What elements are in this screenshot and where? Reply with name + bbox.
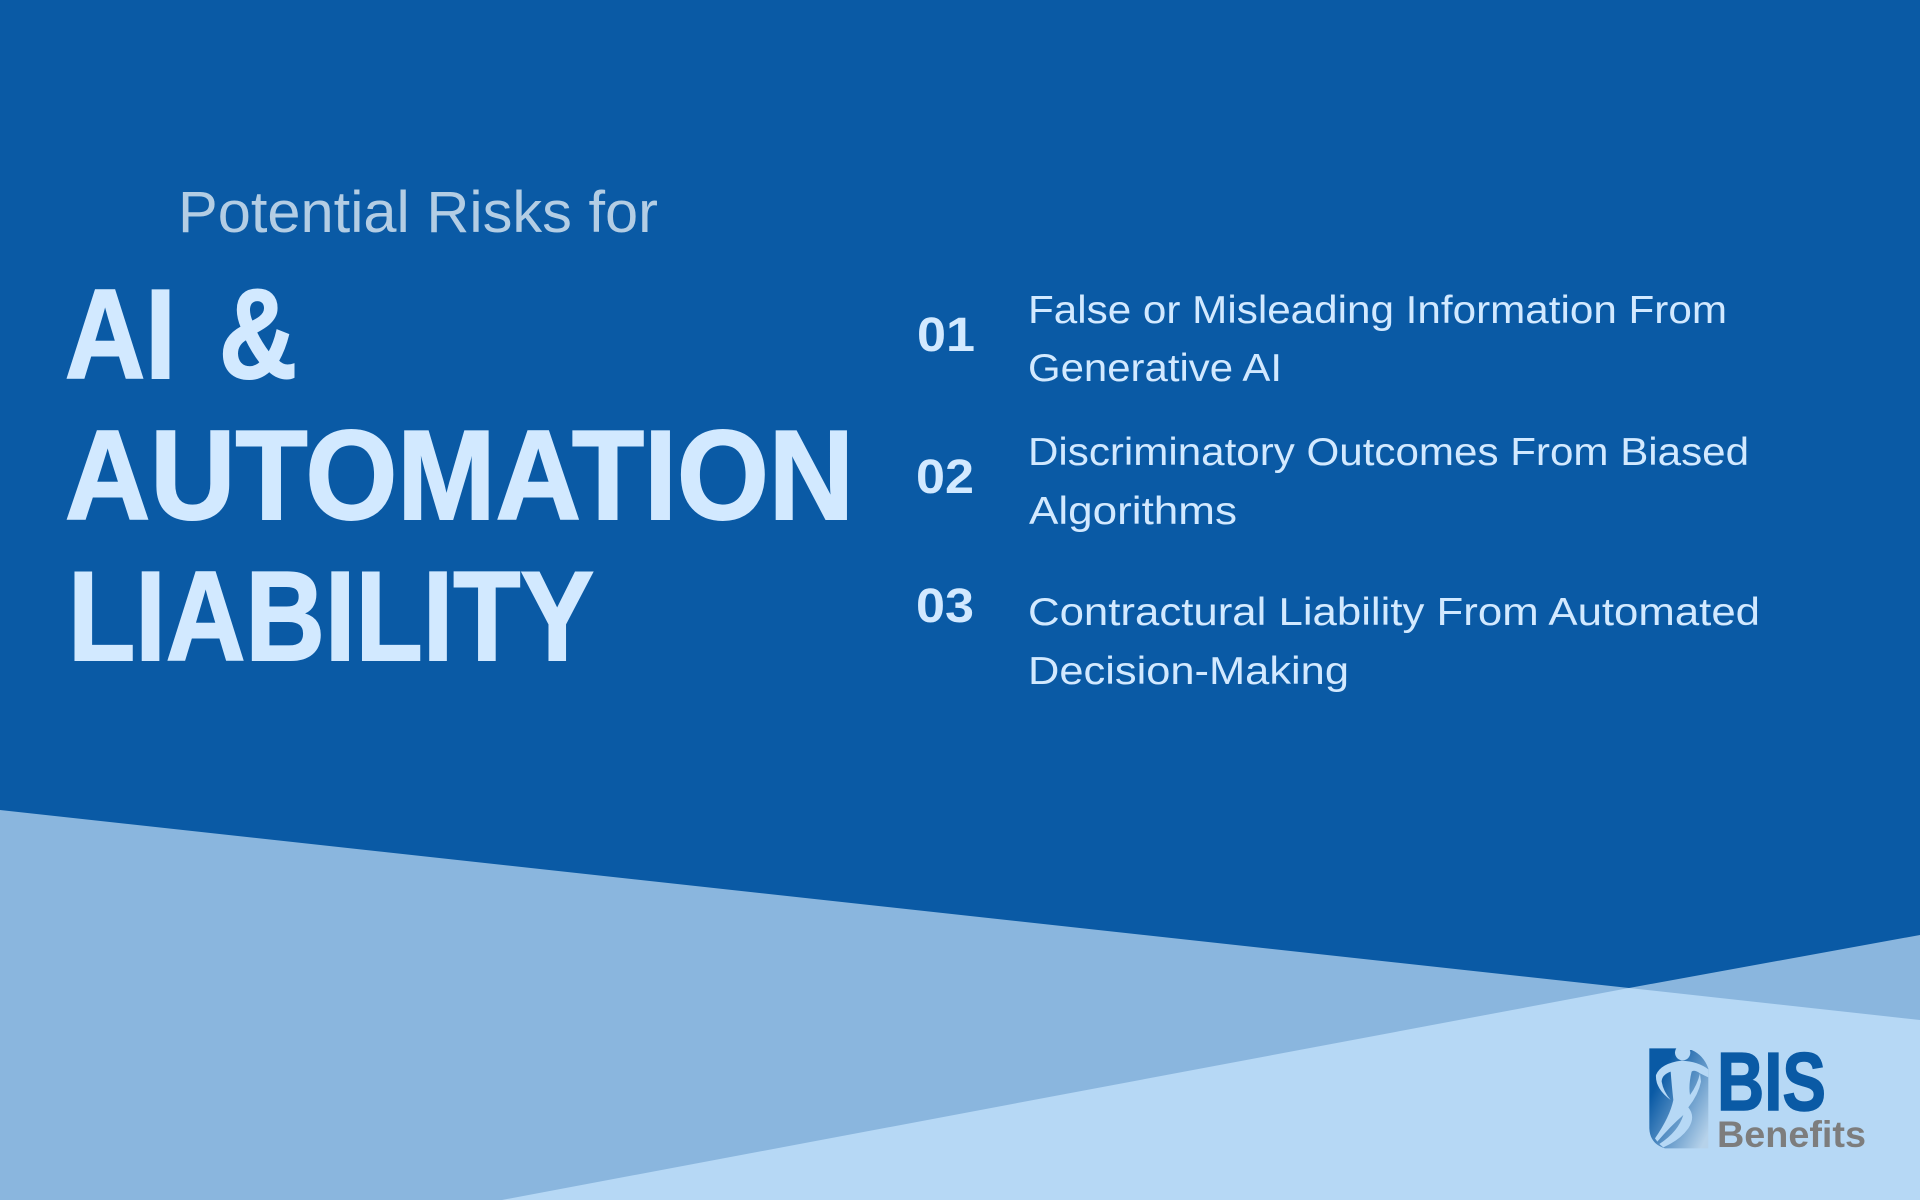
list item 01: False or Misleading Information From xyxy=(1028,289,1727,332)
title: AI xyxy=(65,263,176,405)
title: LIABILITY xyxy=(68,545,594,687)
logo: BIS Benefits: BIS xyxy=(1717,1035,1826,1128)
mid-blue wedge xyxy=(0,810,1920,1200)
list item 01: 01 xyxy=(917,309,975,362)
logo: BIS Benefits: Benefits xyxy=(1717,1114,1866,1155)
list item 01 xyxy=(917,289,1727,390)
light-blue wedge xyxy=(502,988,1920,1200)
list item 02 xyxy=(916,431,1749,533)
subtitle: Potential Risks for xyxy=(178,180,658,245)
list item 03: 03 xyxy=(916,580,974,633)
title xyxy=(65,263,854,687)
icon: runner shield xyxy=(1649,1045,1708,1148)
list item 01: Generative AI xyxy=(1028,347,1282,390)
list item 02: Algorithms xyxy=(1029,490,1237,533)
list item 02: Discriminatory Outcomes From Biased xyxy=(1028,431,1749,474)
list item 02: 02 xyxy=(916,451,974,504)
title: & xyxy=(219,263,297,405)
title: AUTOMATION xyxy=(65,404,854,546)
list item 03: Decision-Making xyxy=(1028,650,1349,693)
list item 03 xyxy=(916,580,1760,693)
list item 03: Contractural Liability From Automated xyxy=(1028,591,1760,634)
logo: BIS Benefits xyxy=(1649,1035,1866,1155)
